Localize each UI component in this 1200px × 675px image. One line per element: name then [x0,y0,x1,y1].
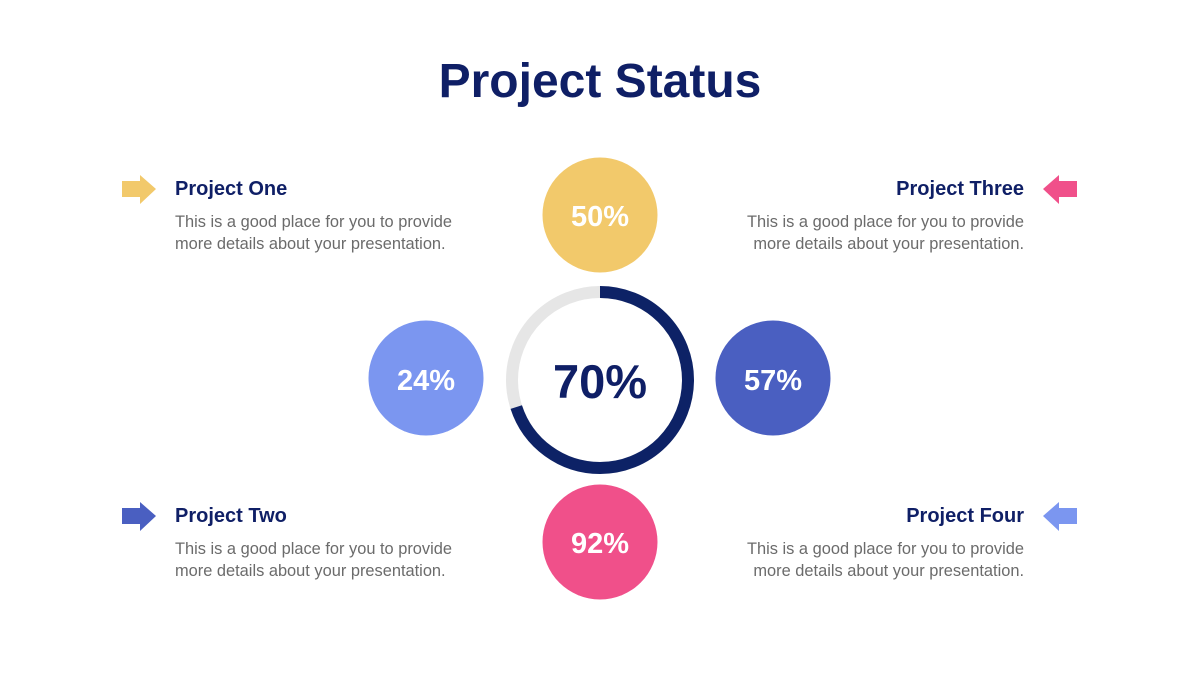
circle 50% [542,158,658,272]
text: project one: Project One [175,178,287,200]
circle 57% [716,320,830,436]
text: project one: more details about your presentation. [175,235,446,253]
icon: arrow project one [122,175,156,204]
circle 24%: 24% [397,365,455,397]
text: project three: Project Three [896,178,1024,200]
text: project one [175,178,452,253]
circle 24% [368,320,484,436]
circle 57%: 57% [744,365,802,397]
icon: arrow project four [1043,502,1077,531]
text: project three: This is a good place for you to provide [747,213,1024,231]
title: Project Status [439,55,761,108]
text: project two: more details about your presentation. [175,562,446,580]
text: project two: This is a good place for you to provide [175,540,452,558]
circle 50%: 50% [571,201,629,233]
text: project one: This is a good place for you to provide [175,213,452,231]
icon: arrow project two [122,502,156,531]
circle 92%: 92% [571,528,629,560]
text: project two: Project Two [175,505,287,527]
text: project four: more details about your presentation. [753,562,1024,580]
text: project four: This is a good place for you to provide [747,540,1024,558]
icon: arrow project three [1043,175,1077,204]
donut 70% [512,292,688,468]
text: project three [747,178,1024,253]
donut 70%: 70% [553,355,647,408]
text: project four [747,505,1024,580]
text: project two [175,505,452,580]
circle 92% [542,484,658,600]
text: project four: Project Four [906,505,1024,527]
text: project three: more details about your presentation. [753,235,1024,253]
